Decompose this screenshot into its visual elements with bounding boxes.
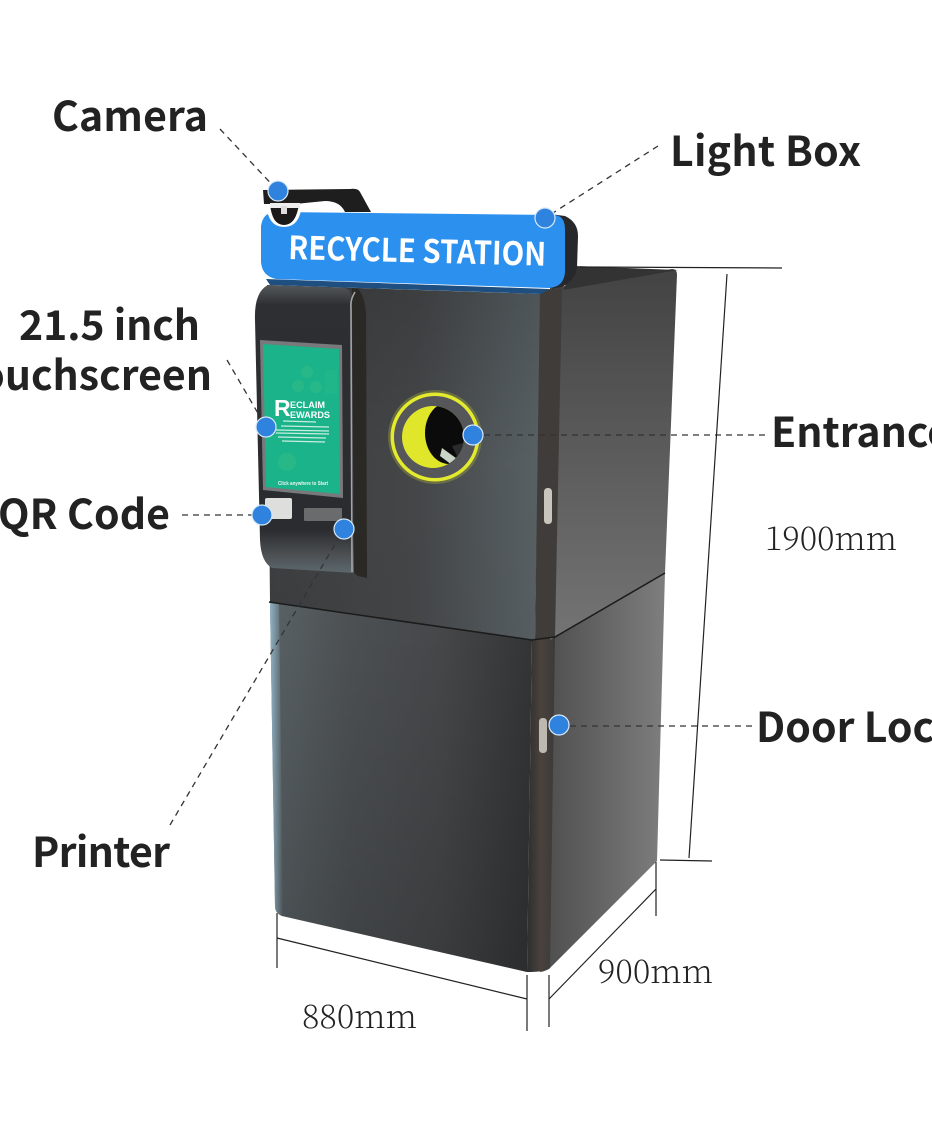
label: 21.5 inch Touchscreen [0, 292, 212, 402]
label: Camera: Camera [52, 83, 208, 143]
light box [261, 203, 578, 294]
label: Printer: Printer [32, 819, 170, 879]
dimension: depth: 900mm [598, 946, 713, 993]
screen caption: Click anywhere to Start [278, 481, 328, 487]
screen logo: R [274, 395, 291, 421]
callout dots [252, 181, 569, 735]
label: QR Code: QR Code [0, 481, 170, 541]
dimension: height [580, 267, 897, 861]
touchscreen [260, 340, 343, 498]
callout lines [170, 129, 766, 825]
screen logo [274, 395, 330, 421]
faint recycling symbols [278, 366, 337, 471]
seam line [269, 573, 665, 640]
QR code reader [265, 498, 292, 519]
camera dome [266, 203, 302, 227]
label: Light Box: Light Box [670, 118, 861, 178]
dimension: depth [549, 862, 713, 1027]
dimension: width [277, 913, 527, 1038]
dimension: width: 880mm [302, 991, 417, 1038]
machine body [267, 266, 678, 972]
control panel [255, 285, 367, 578]
camera arm [263, 189, 371, 212]
screen body text lines [276, 421, 329, 442]
screen logo: EWARDS [290, 410, 330, 420]
upper cabinet [267, 266, 678, 640]
door lock handle lower [539, 718, 547, 753]
light box text: RECYCLE STATION [288, 223, 547, 276]
screen logo: ECLAIM [290, 400, 325, 410]
printer slot [304, 508, 342, 521]
label: 21.5 inch Touchscreen: 21.5 inch [19, 292, 200, 352]
door lock handle upper [544, 488, 552, 524]
lower cabinet [270, 573, 665, 972]
entrance ring [388, 390, 482, 484]
dimension: height: 1900mm [765, 513, 897, 560]
